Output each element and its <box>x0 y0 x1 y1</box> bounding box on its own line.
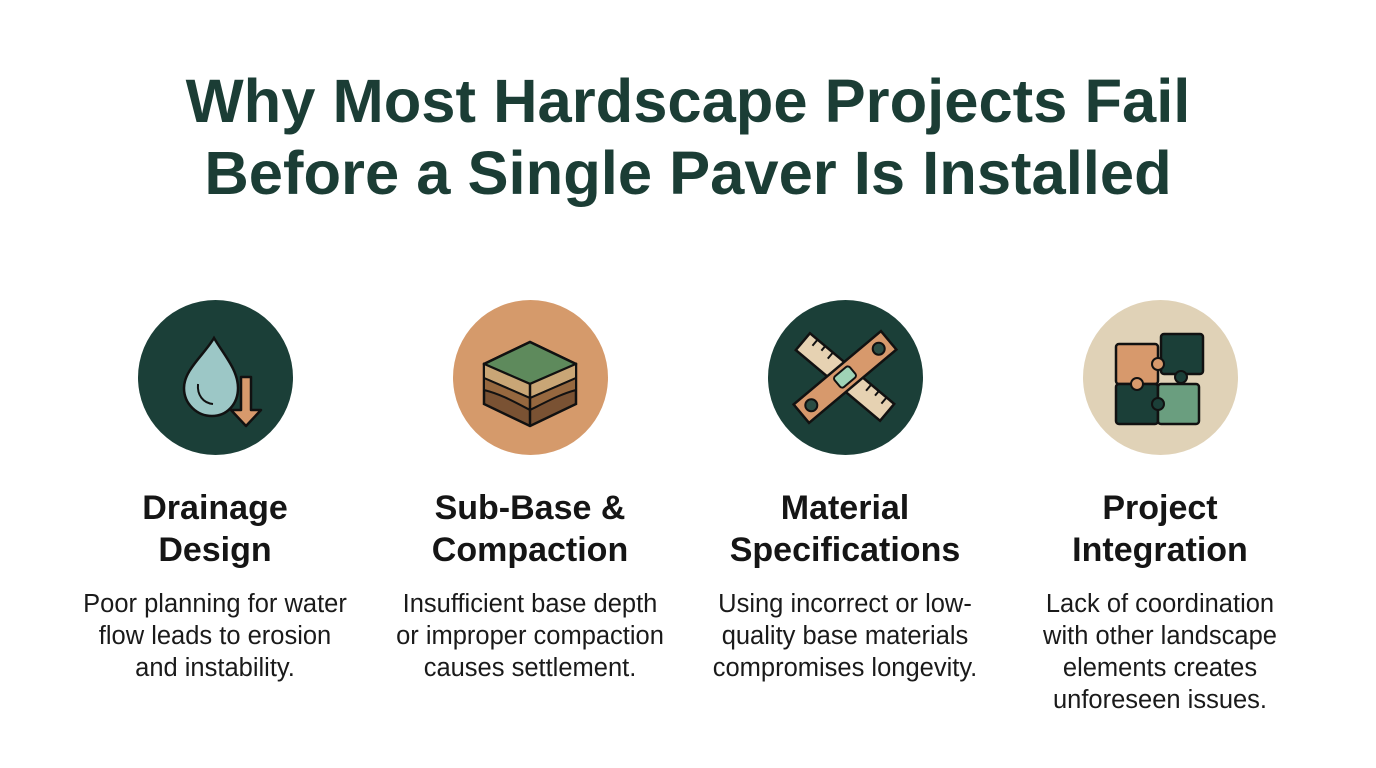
heading: Compaction <box>432 531 628 569</box>
heading: Project <box>1102 489 1218 527</box>
text: unforeseen issues. <box>1053 686 1267 714</box>
icon: soil layers <box>452 300 608 455</box>
text <box>83 590 347 682</box>
icon: ruler and level <box>768 300 922 455</box>
text <box>713 590 977 682</box>
text: quality base materials <box>722 622 968 650</box>
text <box>396 590 664 682</box>
panel: integration <box>1043 300 1277 714</box>
title: Before a Single Paver Is Installed <box>204 139 1172 208</box>
heading: Design <box>158 531 272 569</box>
heading: Integration <box>1072 531 1248 569</box>
heading: Drainage <box>142 489 288 527</box>
heading: Sub-Base & <box>435 489 625 527</box>
title <box>186 67 1190 208</box>
text <box>1043 590 1277 714</box>
heading <box>142 489 288 569</box>
heading: Material <box>781 489 909 527</box>
text: Lack of coordination <box>1046 590 1274 618</box>
heading: Specifications <box>730 531 960 569</box>
text: flow leads to erosion <box>99 622 331 650</box>
text: or improper compaction <box>396 622 664 650</box>
heading <box>432 489 628 569</box>
panel: material <box>713 300 977 682</box>
text: and instability. <box>135 654 295 682</box>
icon: water drop <box>138 300 292 455</box>
panel: drainage <box>83 300 347 682</box>
text: Poor planning for water <box>83 590 347 618</box>
heading <box>730 489 960 569</box>
panel: sub-base <box>396 300 664 682</box>
text: Insufficient base depth <box>403 590 657 618</box>
title: Why Most Hardscape Projects Fail <box>186 67 1190 136</box>
text: elements creates <box>1063 654 1257 682</box>
text: Using incorrect or low- <box>718 590 972 618</box>
text: with other landscape <box>1043 622 1277 650</box>
icon: puzzle <box>1082 300 1238 455</box>
text: causes settlement. <box>424 654 636 682</box>
text: compromises longevity. <box>713 654 977 682</box>
heading <box>1072 489 1248 569</box>
